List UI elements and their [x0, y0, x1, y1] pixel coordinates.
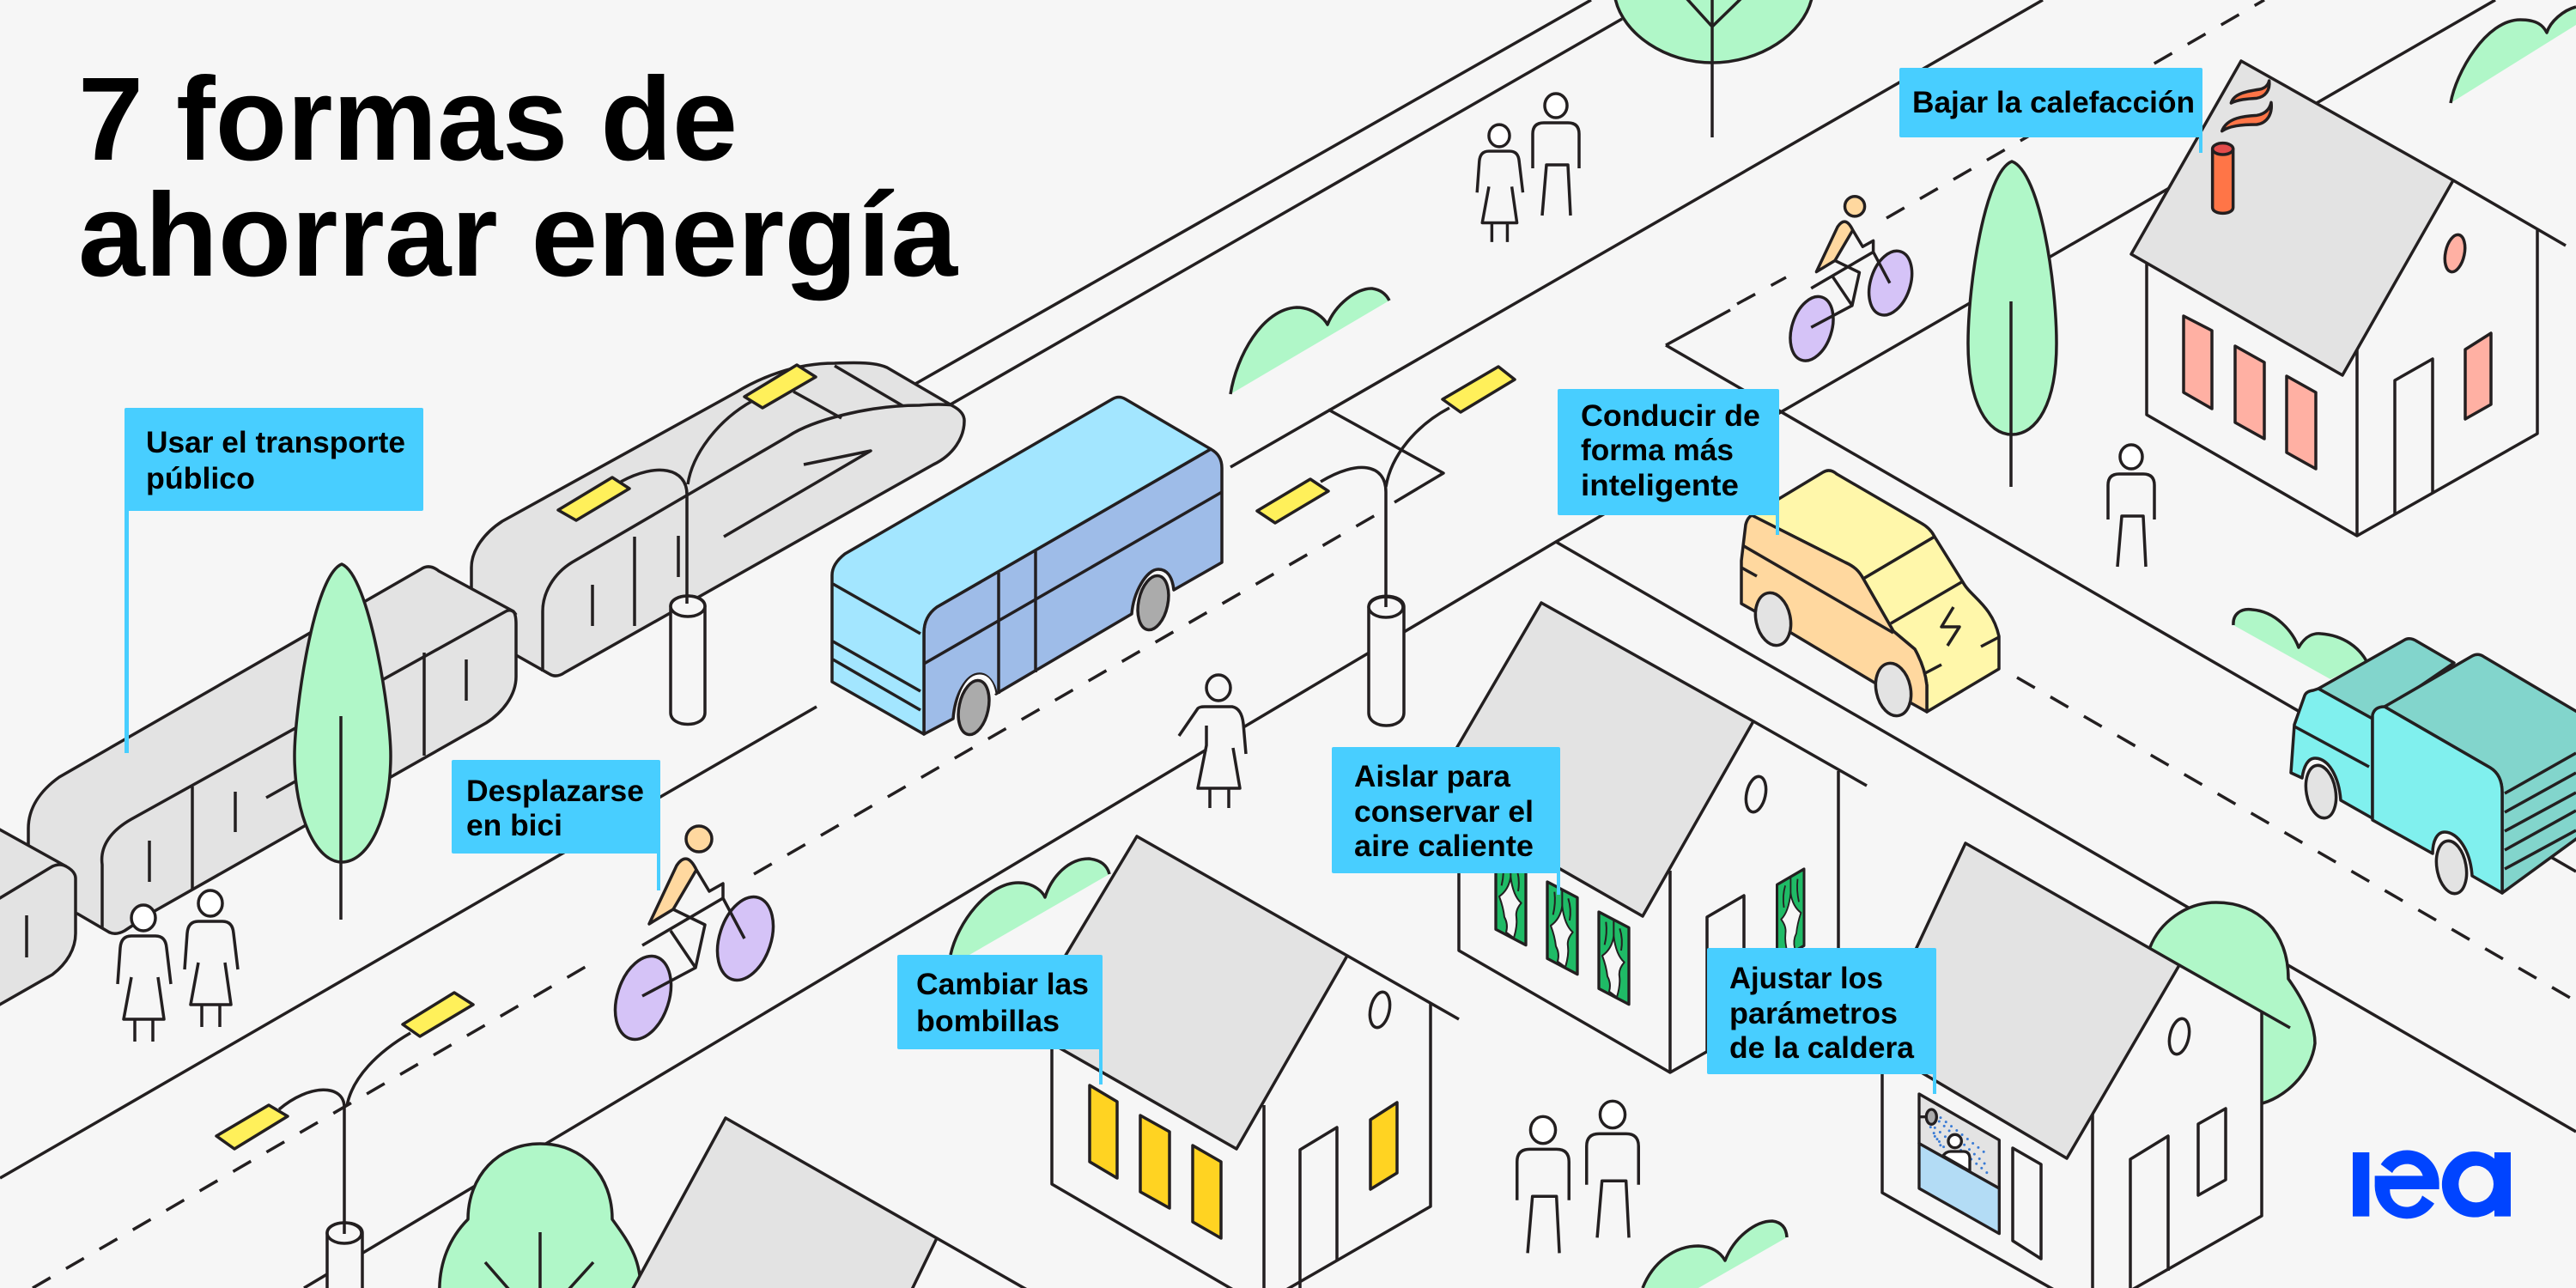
door	[1707, 896, 1744, 1052]
truck	[2291, 639, 2576, 896]
tree: bottom left	[440, 1144, 641, 1288]
house: light bulbs	[1023, 836, 1459, 1288]
house: lowered heating	[2131, 61, 2566, 536]
label: bici: en bici	[466, 809, 562, 842]
bush: top right	[2451, 7, 2576, 103]
door	[2130, 1136, 2168, 1288]
tram	[0, 363, 964, 1006]
bush: centre road	[1230, 289, 1389, 394]
curtained window 3	[1599, 912, 1629, 1005]
bush: bottom	[1643, 1221, 1787, 1288]
bus side	[924, 449, 1222, 734]
shower window	[1919, 1094, 1999, 1234]
people: bottom centre	[1517, 1101, 1638, 1253]
label: bombillas: Cambiar las	[916, 968, 1089, 1001]
label: caldera: de la caldera	[1729, 1031, 1915, 1065]
label: aislar: Aislar para	[1354, 760, 1511, 793]
chimney and smoke	[2213, 81, 2271, 213]
label: conducir	[1558, 389, 1779, 535]
attic window	[1743, 775, 1769, 814]
bush: behind truck	[2233, 610, 2366, 679]
bush: behind lightbulb house	[951, 859, 1109, 955]
label: transporte público: Usar el transporte	[146, 426, 405, 459]
label: caldera: parámetros	[1729, 997, 1898, 1030]
bus	[832, 397, 1222, 738]
bike and rider: top	[1783, 197, 1919, 367]
roof	[1430, 603, 1753, 916]
label: conducir: inteligente	[1581, 469, 1739, 502]
yellow windows	[1090, 1085, 1397, 1238]
car roof	[1752, 471, 1935, 579]
label: calefacción	[1899, 68, 2202, 153]
roof	[2131, 61, 2453, 375]
street lamp: centre	[1257, 367, 1515, 726]
title: 7 formas de	[78, 53, 738, 185]
tree: tall by tram	[295, 564, 391, 920]
person: woman on pavement	[1179, 675, 1246, 808]
attic window	[1367, 990, 1393, 1030]
bike and rider: lower	[605, 826, 783, 1047]
cargo side	[2372, 707, 2502, 893]
curtained window 1	[1496, 853, 1526, 945]
label: caldera: Ajustar los	[1729, 962, 1883, 995]
title	[78, 53, 958, 301]
label: aislar	[1332, 747, 1560, 895]
front carriage	[471, 363, 964, 676]
door	[1300, 1127, 1337, 1288]
pink windows	[2184, 233, 2491, 469]
label: bombillas: bombillas	[916, 1005, 1060, 1038]
truck wheels	[2302, 763, 2340, 820]
label: bombillas	[897, 955, 1103, 1084]
house: bottom left roof	[629, 1118, 1027, 1288]
car front	[1863, 537, 1999, 712]
roof	[1023, 836, 1347, 1149]
label: conducir: Conducir de	[1581, 399, 1760, 433]
title: ahorrar energía	[78, 169, 958, 301]
label: transporte público: público	[146, 462, 255, 495]
door	[2395, 359, 2433, 515]
middle carriage	[28, 567, 516, 933]
curtained window 2	[1547, 882, 1577, 975]
cargo back and top	[2385, 654, 2576, 893]
house: insulated with curtains	[1430, 603, 1867, 1072]
label: calefacción: Bajar la calefacción	[1912, 86, 2195, 119]
label: transporte público	[125, 408, 423, 753]
car side	[1741, 515, 1927, 712]
attic window	[2166, 1017, 2192, 1056]
tree: top centre	[1615, 0, 1812, 137]
people: top centre	[1477, 94, 1579, 242]
bus wheels	[957, 676, 994, 719]
cab side	[2291, 689, 2372, 818]
side windows	[2013, 1109, 2226, 1259]
car	[1741, 471, 1999, 719]
bus roof and front	[832, 397, 1211, 734]
people: by tram	[118, 890, 238, 1042]
label: conducir: forma más	[1581, 434, 1734, 467]
curtained window 4	[1777, 869, 1804, 962]
person: man by house	[2108, 445, 2154, 567]
rear carriage	[0, 828, 76, 1006]
label: bici: Desplazarse	[466, 775, 644, 808]
house: boiler	[1872, 843, 2290, 1288]
street lamp: tram	[558, 365, 816, 725]
cab top	[2318, 639, 2454, 719]
label: aislar: conservar el	[1354, 795, 1534, 829]
tree: tall by bike lane	[1968, 161, 2057, 487]
roof	[1872, 843, 2179, 1158]
tree: behind boiler house	[2129, 902, 2315, 1104]
label: bici	[452, 760, 660, 890]
label: caldera	[1707, 948, 1936, 1094]
bolt icon	[1941, 607, 1959, 646]
label: aislar: aire caliente	[1354, 829, 1534, 863]
street lamp: lower left	[216, 993, 473, 1288]
logo: iea	[2353, 1151, 2511, 1218]
car wheels	[1751, 590, 1795, 648]
